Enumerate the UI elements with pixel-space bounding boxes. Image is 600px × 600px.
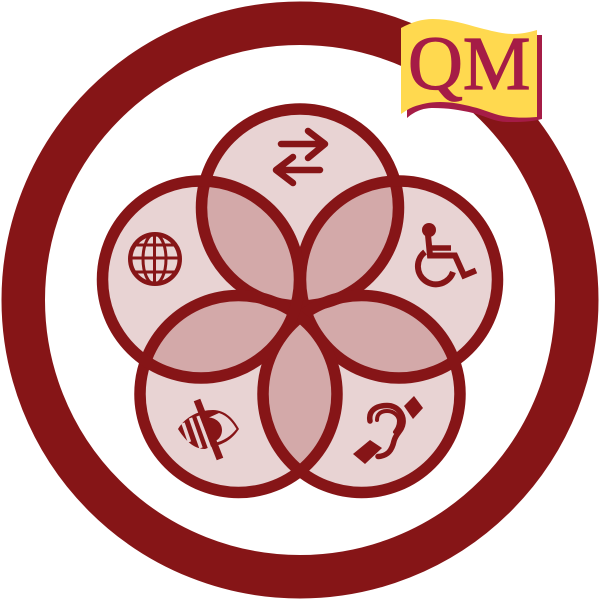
icon: exchange arrows: [276, 131, 325, 183]
circle outlines: [102, 109, 498, 492]
flag: [401, 19, 537, 118]
icon: wheelchair: [418, 223, 476, 284]
icon: hearing loop: [353, 396, 423, 464]
flag wordmark: QM: [408, 22, 530, 106]
overlap petals: [152, 187, 448, 464]
venn diagram of five circles: [102, 109, 498, 492]
icon: low vision eye: [178, 400, 239, 459]
logo: QM flag: [401, 19, 542, 122]
icon: globe: [130, 234, 180, 284]
flag shadow: [407, 35, 542, 122]
circle fills: [102, 109, 498, 492]
